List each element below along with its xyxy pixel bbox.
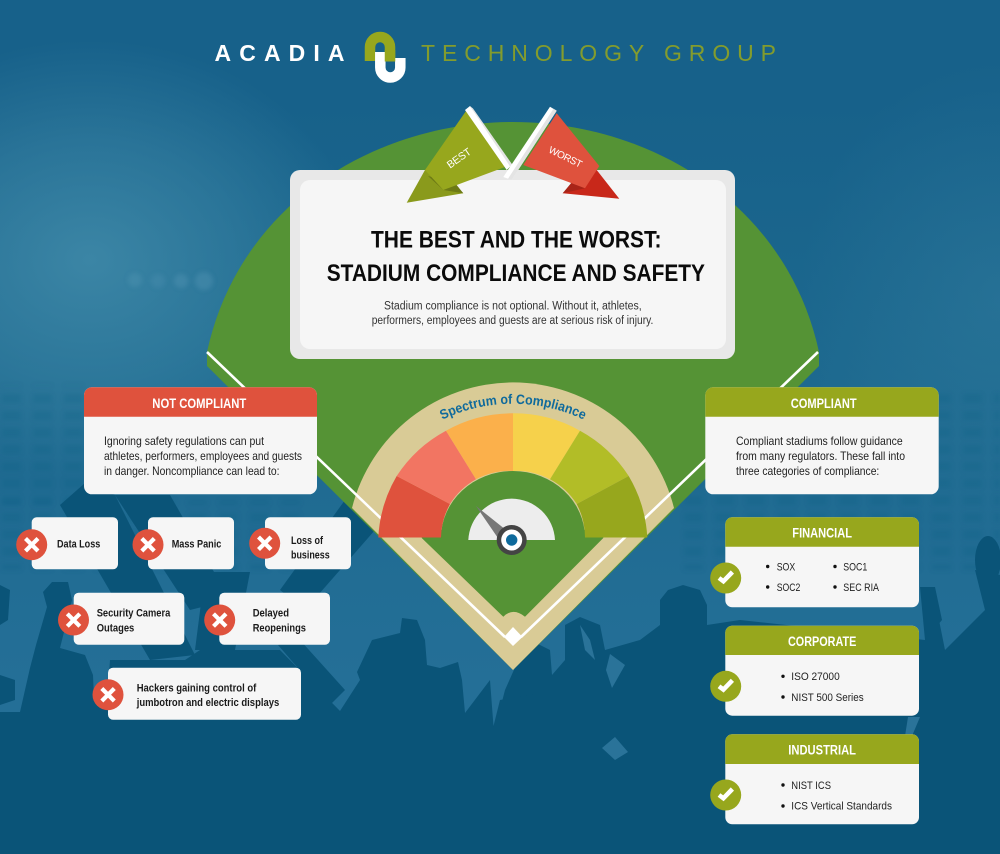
category: corporate: ISO 27000 (791, 671, 840, 683)
risk: delayed reopenings: Delayed (253, 608, 289, 620)
foul line left (207, 352, 505, 637)
risk: security camera outages (58, 593, 184, 645)
risk: security camera outages: Security Camera (97, 608, 171, 620)
logo (214, 37, 776, 78)
panel frame (290, 170, 735, 359)
panel inner (300, 180, 726, 349)
heading: STADIUM COMPLIANCE AND SAFETY (327, 260, 705, 287)
category: corporate: CORPORATE (788, 634, 856, 649)
body text: Ignoring safety regulations can put (104, 434, 265, 448)
header: not compliant (84, 387, 317, 417)
infield grass (422, 530, 603, 617)
category: financial: SOC2 (777, 582, 800, 594)
header label: COMPLIANT (791, 396, 857, 411)
risk: hackers (92, 668, 301, 720)
baseball field (207, 122, 819, 670)
infield dirt fan (352, 382, 674, 670)
intro text (372, 300, 653, 327)
gauge dial face (468, 499, 555, 540)
header label: NOT COMPLIANT (152, 396, 247, 411)
risk: delayed reopenings: Reopenings (253, 622, 306, 634)
gauge segment 3: orange (446, 413, 513, 479)
heading: THE BEST AND THE WORST: (371, 226, 662, 254)
crowd silhouette (0, 483, 1000, 854)
category: industrial: NIST ICS (791, 780, 831, 792)
body text (104, 434, 302, 478)
category: financial (710, 517, 919, 607)
foul line right (521, 352, 818, 637)
risk: loss of business: Loss of (291, 535, 323, 547)
flag: best: BEST (445, 146, 474, 171)
category: financial: SOC1 (843, 562, 867, 574)
risk: data loss: Data Loss (57, 538, 100, 550)
category: corporate (710, 626, 919, 716)
category: corporate: NIST 500 Series (791, 692, 864, 704)
spectrum gauge (378, 394, 648, 555)
risk: security camera outages: Outages (97, 622, 134, 634)
risk: loss of business: business (291, 550, 330, 562)
heading (327, 226, 705, 287)
gauge label: spectrum of compliance: Spectrum of Compliance (440, 394, 586, 419)
title panel (290, 170, 735, 359)
risk: delayed reopenings (204, 593, 330, 645)
risk: hackers: Hackers gaining control of (137, 682, 257, 694)
body text: Compliant stadiums follow guidance (736, 434, 903, 448)
gauge segment 2: coral (397, 431, 476, 504)
gauge segment 1: red (378, 476, 450, 538)
flag: worst: WORST (547, 145, 584, 171)
risk: mass panic: Mass Panic (172, 538, 221, 550)
category: industrial: ICS Vertical Standards (791, 800, 892, 812)
risk: mass panic (132, 517, 234, 569)
outfield grass (207, 122, 819, 670)
body text: from many regulators. These fall into (736, 449, 905, 463)
panel: compliant (705, 387, 939, 494)
intro text: performers, employees and guests are at serious risk of injury. (372, 315, 653, 327)
flag: worst (503, 107, 619, 199)
category: financial: FINANCIAL (792, 526, 852, 540)
panel: not compliant (84, 387, 317, 494)
category: financial: SOX (777, 562, 796, 574)
gauge segment 4: yellow (513, 413, 580, 479)
body text: athletes, performers, employees and guests (104, 449, 302, 463)
risk: hackers: jumbotron and electric displays (136, 697, 279, 709)
home plate (504, 627, 522, 646)
gauge segment 5: lime (550, 431, 629, 504)
category: industrial: INDUSTRIAL (788, 742, 856, 758)
header: compliant (705, 387, 939, 417)
gauge segment 6: olive (577, 476, 647, 538)
category: financial: SEC RIA (843, 582, 880, 594)
body text (736, 434, 905, 478)
body text: three categories of compliance: (736, 464, 879, 478)
logo mark: interlinked rings (370, 37, 400, 78)
logo wordmark: Acadia: ACADIA (214, 40, 344, 66)
risk: loss of business (249, 517, 351, 569)
risk: data loss (16, 517, 118, 569)
gauge needle (476, 506, 506, 541)
intro text: Stadium compliance is not optional. Without it, athletes, (384, 300, 642, 312)
gauge hub (497, 525, 527, 555)
logo wordmark: Technology Group: TECHNOLOGY GROUP (421, 40, 776, 66)
crowd gaps: light patches between figures (580, 625, 920, 760)
gauge inner green (441, 471, 585, 538)
body text: in danger. Noncompliance can lead to: (104, 464, 280, 478)
category: industrial (710, 734, 919, 824)
flag: best (407, 106, 514, 203)
